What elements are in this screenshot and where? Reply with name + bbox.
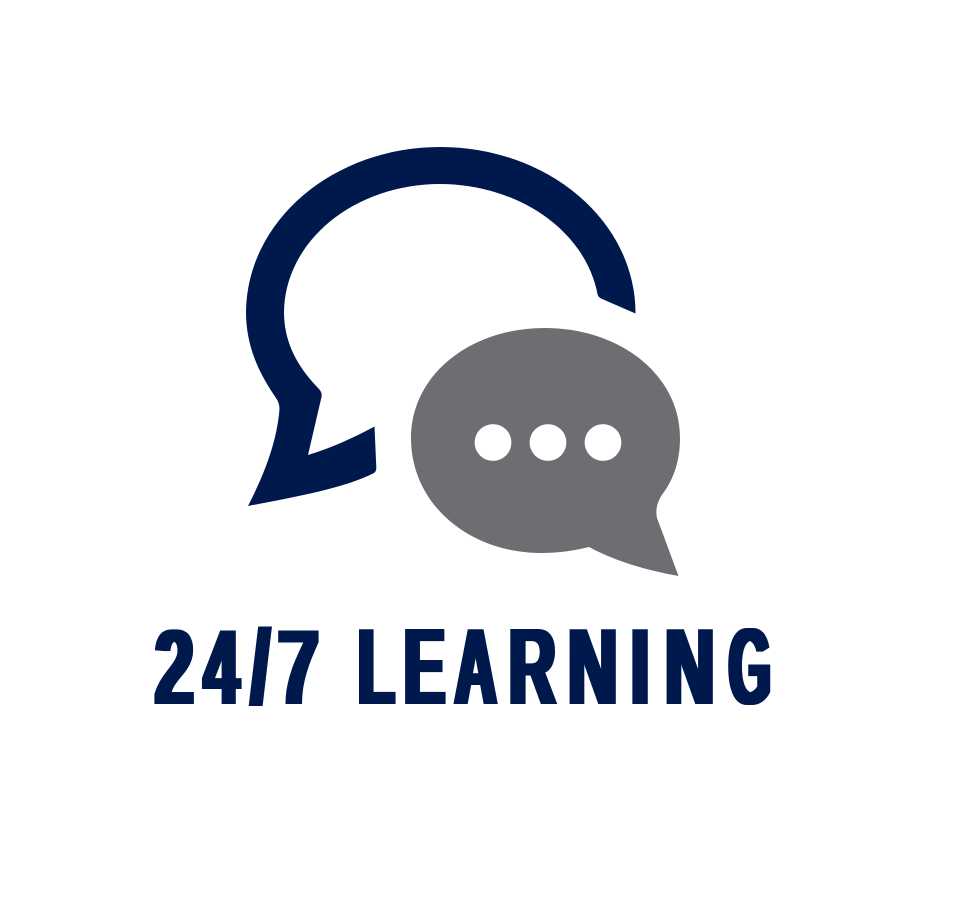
- title: E: [404, 606, 445, 728]
- title: G: [728, 606, 770, 728]
- icon: grey filled speech bubble with dots: [411, 328, 680, 576]
- title: /: [250, 607, 269, 727]
- title: L: [358, 606, 394, 728]
- title: [154, 606, 770, 728]
- title: 2: [155, 607, 194, 727]
- title: 4: [204, 607, 239, 727]
- title: R: [509, 606, 555, 728]
- title: A: [455, 606, 496, 728]
- icon: navy outline speech bubble: [246, 147, 636, 506]
- title: N: [665, 606, 714, 728]
- icon: dot middle: [530, 424, 566, 461]
- title: N: [568, 606, 618, 728]
- title: I: [631, 606, 650, 728]
- icon: dot left: [475, 424, 511, 461]
- icon: dot right: [585, 424, 621, 461]
- title: 7: [278, 607, 319, 727]
